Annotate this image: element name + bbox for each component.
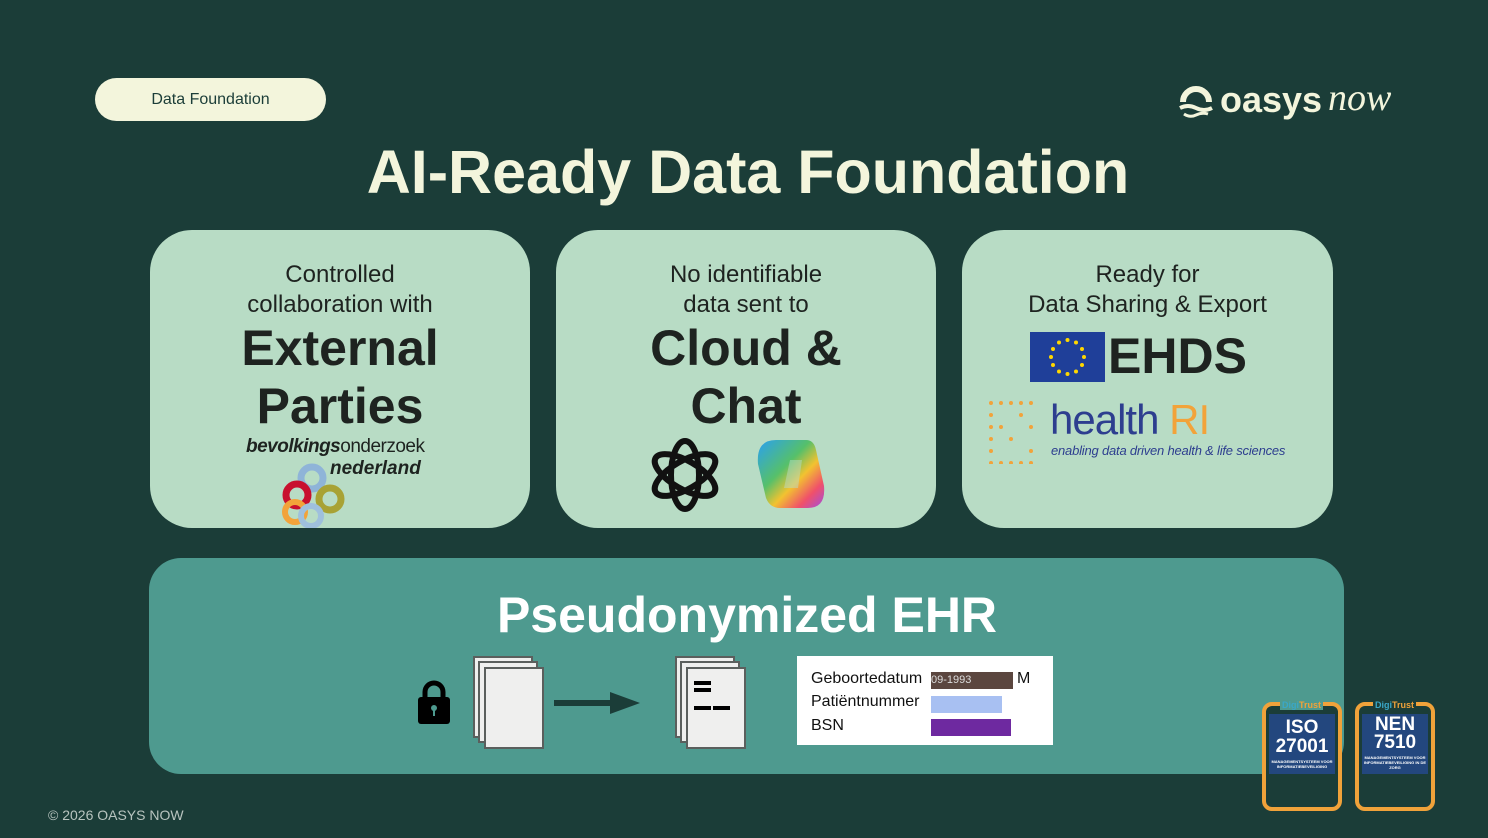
icon: lock bbox=[418, 680, 450, 724]
card: cloud & chat: Chat bbox=[690, 378, 802, 434]
pill: Data Foundation: Data Foundation bbox=[151, 91, 270, 108]
badge: ISO 27001 bbox=[1262, 702, 1342, 811]
badge: NEN 7510: MANAGEMENTSYSTEEM VOOR INFORMATIEBEVEILIGING IN DE ZORG bbox=[1364, 755, 1426, 770]
badge: ISO 27001: MANAGEMENTSYSTEEM VOOR INFORMATIEBEVEILIGING bbox=[1271, 759, 1333, 769]
card: external parties: collaboration with bbox=[247, 291, 433, 318]
card: external parties: External bbox=[241, 320, 439, 376]
title: AI-Ready Data Foundation bbox=[367, 138, 1129, 206]
footer copyright: © 2026 OASYS NOW bbox=[48, 807, 184, 823]
card: cloud & chat: Cloud & bbox=[650, 320, 842, 376]
badge: NEN 7510: 7510 bbox=[1374, 732, 1416, 753]
icon: openai bbox=[652, 438, 718, 512]
card: EHDS / health RI bbox=[962, 230, 1333, 528]
card: EHDS / health RI: Ready for bbox=[1095, 261, 1200, 288]
icon: copilot bbox=[758, 440, 824, 508]
badge: NEN 7510: NEN bbox=[1375, 714, 1415, 735]
panel: pseudonymized EHR bbox=[149, 558, 1344, 774]
card: external parties bbox=[150, 230, 530, 528]
pseudonymized record table bbox=[797, 656, 1053, 745]
logo: oasys now bbox=[1179, 77, 1392, 120]
logo: bevolkingsonderzoek nederland: bevolkingsonderzoek bbox=[246, 436, 424, 457]
badge: NEN 7510 bbox=[1355, 702, 1435, 811]
card: EHDS / health RI: Data Sharing & Export bbox=[1028, 291, 1267, 318]
heading: Pseudonymized EHR bbox=[497, 587, 997, 643]
icon: pseudonymized documents bbox=[675, 656, 746, 749]
pseudonymized record table: Patiëntnummer bbox=[811, 693, 920, 710]
card: cloud & chat bbox=[556, 230, 936, 528]
card: cloud & chat: data sent to bbox=[683, 291, 809, 318]
logo: oasys now: now bbox=[1328, 77, 1391, 119]
card: external parties: Controlled bbox=[285, 261, 395, 288]
card: cloud & chat: No identifiable bbox=[670, 261, 822, 288]
badge: NEN 7510: DigiTrust bbox=[1375, 700, 1414, 710]
logo: oasys now: oasys bbox=[1220, 79, 1322, 120]
logo: bevolkingsonderzoek nederland: nederland bbox=[330, 458, 421, 479]
pseudonymized record table: M bbox=[1017, 670, 1030, 687]
logo: health RI: health RI bbox=[1050, 396, 1209, 443]
pseudonymized record table: Geboortedatum bbox=[811, 670, 922, 687]
EHDS text: EHDS bbox=[1108, 328, 1247, 384]
logo: bevolkingsonderzoek nederland bbox=[246, 436, 425, 528]
logo: health RI bbox=[989, 396, 1285, 464]
pill: Data Foundation bbox=[95, 78, 326, 121]
badge: ISO 27001: 27001 bbox=[1276, 736, 1328, 757]
badge: ISO 27001: DigiTrust bbox=[1282, 700, 1321, 710]
pseudonymized record table: BSN bbox=[811, 717, 844, 734]
icon: EU flag bbox=[1030, 332, 1105, 382]
pseudonymized record table: 09-1993 bbox=[931, 674, 971, 686]
card: external parties: Parties bbox=[257, 378, 423, 434]
icon: documents bbox=[473, 656, 544, 749]
logo: health RI: enabling data driven health & life sciences bbox=[1051, 443, 1285, 458]
badge: ISO 27001: ISO bbox=[1286, 717, 1318, 738]
arrow bbox=[554, 692, 640, 714]
